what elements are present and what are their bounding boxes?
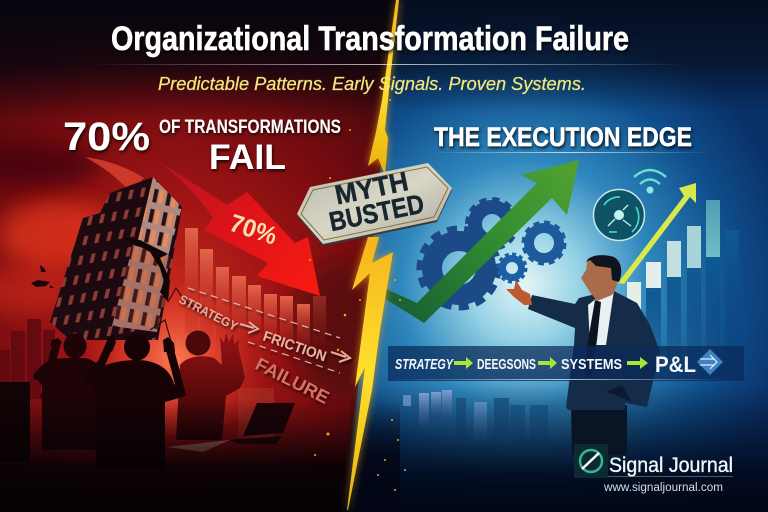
heading: 70% of transformations fail: [63, 115, 341, 177]
hip hand: [606, 385, 632, 402]
flow labels: strategy friction failure: FRICTION: [261, 329, 328, 365]
process flow band: SYSTEMS: [561, 356, 622, 373]
large gear: [420, 229, 498, 307]
subtitle: Predictable Patterns. Early Signals. Proven Systems.: [158, 73, 586, 94]
person 2: [86, 334, 186, 470]
logo: signal journal: [574, 444, 733, 494]
icon: wifi signal: [634, 170, 666, 194]
arrow label: 70%: [226, 209, 280, 251]
top gear: [468, 200, 516, 248]
red bar chart: [185, 228, 326, 346]
main title: Organizational Transformation Failure: [111, 20, 629, 58]
red 70% arrow: [160, 162, 320, 296]
icon: laptop and papers: [167, 403, 295, 452]
process flow band: DEEGSONS: [477, 356, 536, 373]
icon: lightning bolt: [347, 0, 399, 510]
heading: 70% of transformations fail: OF TRANSFORMATIONS: [159, 117, 341, 138]
heading: 70% of transformations fail: 70%: [63, 115, 150, 159]
badge: myth busted: MYTH: [332, 166, 411, 210]
process flow band: STRATEGY: [395, 356, 454, 373]
panel: blue execution side background: [345, 0, 768, 512]
logo: signal journal: Signal Journal: [609, 454, 733, 477]
process flow band: [388, 346, 744, 381]
flow labels: strategy friction failure: STRATEGY: [177, 292, 241, 334]
green rising arrow: [384, 160, 579, 323]
badge: myth busted: [297, 163, 452, 246]
head: [581, 258, 620, 301]
silhouettes: three people with raised hands: [0, 330, 245, 470]
tie: [584, 300, 601, 378]
person 3: [176, 330, 245, 440]
hand: [506, 280, 532, 305]
small gear: [498, 254, 526, 282]
right gear: [524, 222, 564, 264]
heading: 70% of transformations fail: FAIL: [209, 138, 286, 177]
icon: radar dial: [594, 190, 644, 240]
person 1: [35, 334, 108, 450]
logo: signal journal: www.signaljournal.com: [603, 482, 723, 494]
sparks: [309, 99, 406, 491]
bottom vignette left: [0, 400, 400, 512]
bottom vignette right: [345, 384, 768, 512]
flow labels: strategy friction failure: [177, 288, 350, 408]
yellow-green growth arrow: [618, 183, 696, 284]
legs: [571, 405, 627, 455]
shirt: [588, 290, 614, 345]
flow labels: strategy friction failure: FAILURE: [252, 354, 333, 408]
hair: [586, 255, 621, 282]
panel: red failure side background: [0, 0, 400, 512]
icon: gears: [420, 200, 564, 307]
process flow band: P&L: [655, 352, 696, 377]
badge: myth busted: BUSTED: [327, 189, 427, 237]
icon: cracked building: [50, 177, 200, 345]
skyline right: [403, 390, 548, 445]
skyline left: [0, 319, 274, 438]
red swoosh behind building: [85, 157, 144, 192]
heading: the execution edge: THE EXECUTION EDGE: [434, 122, 692, 152]
right ascending bar chart: [627, 200, 739, 370]
jacket: [528, 290, 660, 410]
businessman: [506, 255, 660, 455]
icon: debris: [31, 265, 54, 288]
